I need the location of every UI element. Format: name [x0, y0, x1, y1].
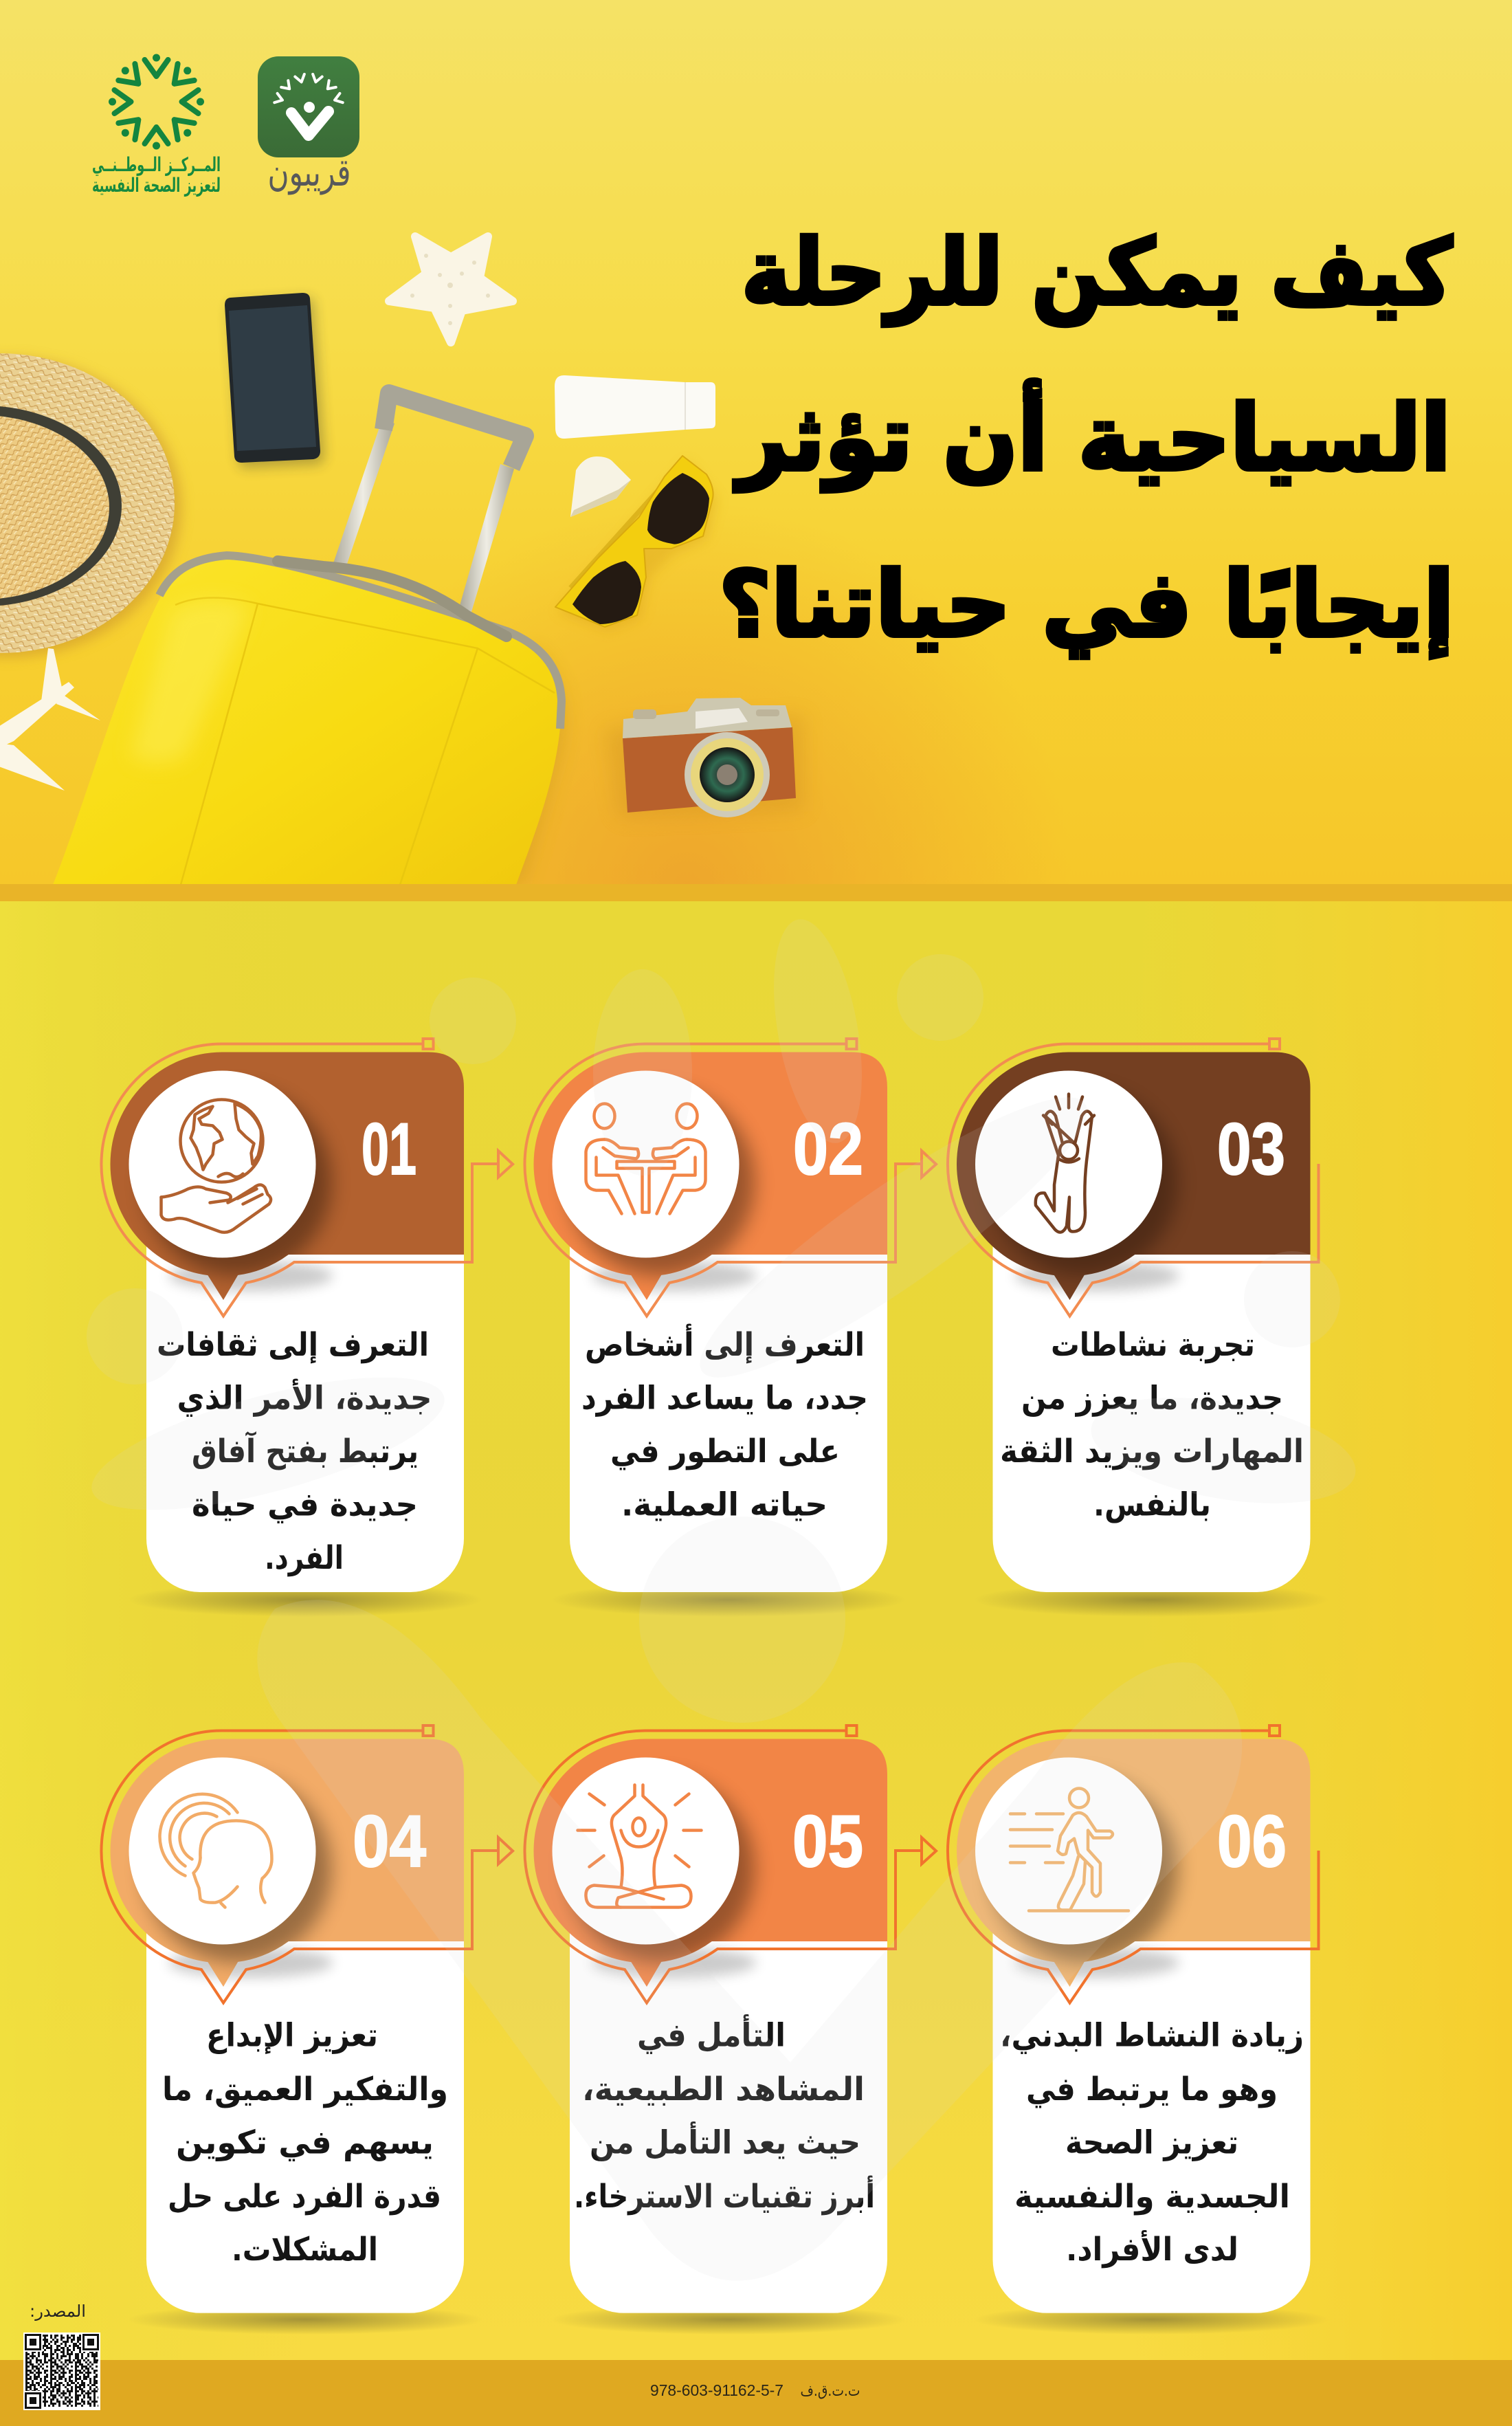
text: card 01: يرتبط بفتح آفاق [192, 1431, 419, 1470]
source label: المصدر: [30, 2302, 86, 2321]
text: card 02: على التطور في [610, 1433, 840, 1470]
icon: person jumping [1036, 1094, 1094, 1232]
illustration: sunglasses [555, 456, 718, 631]
card 05: meditation [524, 1725, 936, 2335]
text: card 03 [1000, 1326, 1304, 1523]
icon: person walking [1010, 1789, 1129, 1911]
text: card 05: المشاهد الطبيعية، [582, 2071, 865, 2108]
icon: two people at a table [586, 1104, 705, 1214]
illustration: toy airplane [0, 648, 100, 791]
icon: person meditating [577, 1785, 701, 1907]
text: card 01: جديدة، الأمر الذي [177, 1378, 432, 1418]
logo: National Center for Mental Health Promotion: لتعزيز الصحة النفسية [92, 174, 221, 197]
title: إيجابًا في حياتنا؟ [719, 552, 1454, 659]
text: card 05 [574, 2014, 875, 2216]
text: card 03: المهارات ويزيد الثقة [1000, 1433, 1304, 1470]
illustration: straw hat [0, 353, 181, 657]
number 01: 01 [362, 1107, 416, 1190]
text: card 03: تجربة نشاطات [1051, 1326, 1255, 1364]
text: card 02 [581, 1323, 868, 1523]
text: card 04: يسهم في تكوين [176, 2124, 434, 2162]
title [719, 220, 1454, 659]
text: card 04 [162, 2017, 448, 2269]
number 04: 04 [353, 1800, 426, 1882]
text: card 04: قدرة الفرد على حل [168, 2178, 441, 2216]
hero photo panel with travel objects [0, 0, 1512, 885]
text: card 06: الجسدية والنفسية [1014, 2178, 1290, 2216]
card 02: new people [524, 1039, 936, 1617]
number 06: 06 [1217, 1800, 1287, 1882]
text: card 04: والتفكير العميق، ما [162, 2071, 448, 2108]
footer band [0, 2360, 1512, 2426]
suitcase handle [331, 393, 525, 612]
ISBN text: 978-603-91162-5-7 [650, 2381, 783, 2399]
text: card 02: حياته العملية. [621, 1486, 827, 1523]
icon: head with thought waves [160, 1794, 272, 1907]
decorative faint background shapes overlaying the infographic [80, 912, 1364, 2281]
illustration: starfish [389, 236, 513, 342]
logo: Qariboon app icon: قريبون [268, 151, 351, 195]
ISBN text [650, 2381, 860, 2400]
icon: globe in hand [161, 1100, 271, 1233]
text: card 06: زيادة النشاط البدني، [1000, 2017, 1304, 2055]
text: card 03: بالنفس. [1093, 1486, 1211, 1523]
logo: Qariboon app icon [258, 56, 359, 195]
ISBN text: ت.ت.ق.ف [800, 2383, 860, 2400]
illustration: makeup sponge [570, 456, 631, 517]
number 05: 05 [792, 1800, 863, 1882]
text: card 06: لدى الأفراد. [1066, 2229, 1238, 2269]
card 04: creativity [101, 1725, 513, 2335]
logo: National Center for Mental Health Promotion [92, 54, 221, 197]
text: card 05: أبرز تقنيات الاسترخاء. [574, 2175, 875, 2216]
card 03: new activities [948, 1039, 1329, 1617]
text: card 01: الفرد. [265, 1539, 344, 1577]
logo: National Center for Mental Health Promotion: المــركــز الــوطــنــي [92, 153, 221, 176]
text: card 06: تعزيز الصحة [1065, 2124, 1238, 2162]
card 01: cultures [101, 1039, 513, 1617]
page background: main yellow section [0, 894, 1512, 2365]
text: card 04: المشكلات. [232, 2231, 378, 2269]
card 06: physical activity [948, 1725, 1329, 2335]
illustration: yellow suitcase [53, 393, 565, 885]
number 03: 03 [1217, 1107, 1285, 1190]
number 02: 02 [793, 1107, 863, 1190]
title: كيف يمكن للرحلة [742, 220, 1452, 326]
text: card 05: التأمل في [637, 2014, 786, 2055]
text: card 02: جدد، ما يساعد الفرد [581, 1379, 868, 1418]
illustration: sunscreen tube [555, 375, 715, 439]
text: card 01: التعرف إلى ثقافات [157, 1326, 429, 1364]
text: card 06: وهو ما يرتبط في [1026, 2071, 1278, 2108]
text: card 02: التعرف إلى أشخاص [585, 1323, 865, 1364]
illustration: smartphone [225, 293, 324, 468]
text: card 01 [157, 1326, 432, 1577]
text: card 01: جديدة في حياة [192, 1486, 418, 1523]
title: السياحية أن تؤثر [733, 379, 1451, 492]
text: card 04: تعزيز الإبداع [206, 2017, 378, 2055]
hero bottom band [0, 884, 1512, 901]
text: card 05: حيث يعد التأمل من [590, 2121, 860, 2162]
text: card 03: جديدة، ما يعزز من [1021, 1379, 1283, 1418]
QR code [23, 2333, 100, 2410]
illustration: camera [605, 698, 804, 818]
text: card 06 [1000, 2017, 1304, 2269]
